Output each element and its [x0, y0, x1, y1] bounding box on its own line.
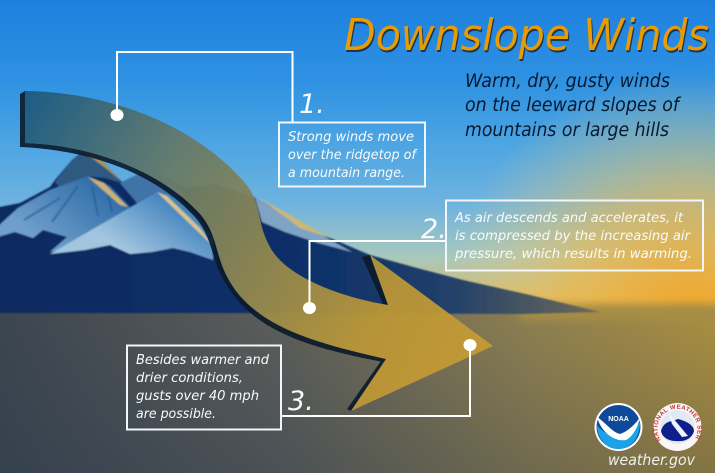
middle peak snow: [120, 172, 185, 204]
ground: [0, 304, 715, 473]
text box 1: [279, 122, 425, 186]
website label: weather.gov: [608, 451, 696, 469]
text box 2: is compressed by the increasing air: [455, 228, 691, 244]
mountain range: [0, 152, 600, 314]
step number 1: 1.: [299, 89, 325, 120]
snow streaks: [24, 186, 112, 222]
marker dot 3: [464, 339, 476, 351]
leader line 1: [117, 52, 292, 122]
subtitle text: mountains or large hills: [465, 120, 669, 141]
arrow shadow: [20, 91, 388, 411]
step number 3: 3.: [288, 386, 314, 417]
left peak snow: [0, 176, 135, 252]
text box 3: Besides warmer and: [136, 352, 269, 368]
text box 3: are possible.: [136, 406, 216, 422]
wind arrow: [20, 91, 493, 411]
text box 3: [127, 346, 281, 430]
front peak snow: [50, 192, 213, 260]
callout 1: [110, 52, 425, 186]
text box 3: gusts over 40 mph: [136, 388, 259, 404]
leader line 2: [310, 241, 446, 308]
marker dot 2: [303, 302, 316, 314]
marker dot 1: [110, 109, 124, 121]
callout 3: [127, 339, 476, 430]
leader line 3: [281, 345, 470, 416]
text box 3: drier conditions,: [136, 370, 243, 386]
text box 1: Strong winds move: [288, 129, 414, 145]
far right ridge snow: [255, 198, 352, 252]
text box 2: As air descends and accelerates, it: [454, 210, 684, 226]
subtitle text: on the leeward slopes of: [465, 95, 681, 116]
text box 1: over the ridgetop of: [288, 147, 418, 163]
icon: National Weather Service logo: NATIONAL WEATHER SERVICE: [653, 404, 702, 442]
background sky: [0, 0, 715, 330]
text box 1: a mountain range.: [288, 165, 405, 181]
icon: NOAA logo: NOAA: [608, 416, 629, 423]
subtitle text: Warm, dry, gusty winds: [465, 71, 670, 92]
text box 2: pressure, which results in warming.: [454, 246, 692, 262]
text box 2: [446, 200, 703, 270]
peak rock: [55, 152, 122, 190]
sunlit ridges: [157, 192, 213, 246]
step number 2: 2.: [421, 214, 447, 245]
icon: NOAA logo: [594, 403, 642, 451]
arrow body: [25, 91, 493, 411]
callout 2: [303, 200, 703, 314]
subtitle text: [465, 71, 681, 141]
